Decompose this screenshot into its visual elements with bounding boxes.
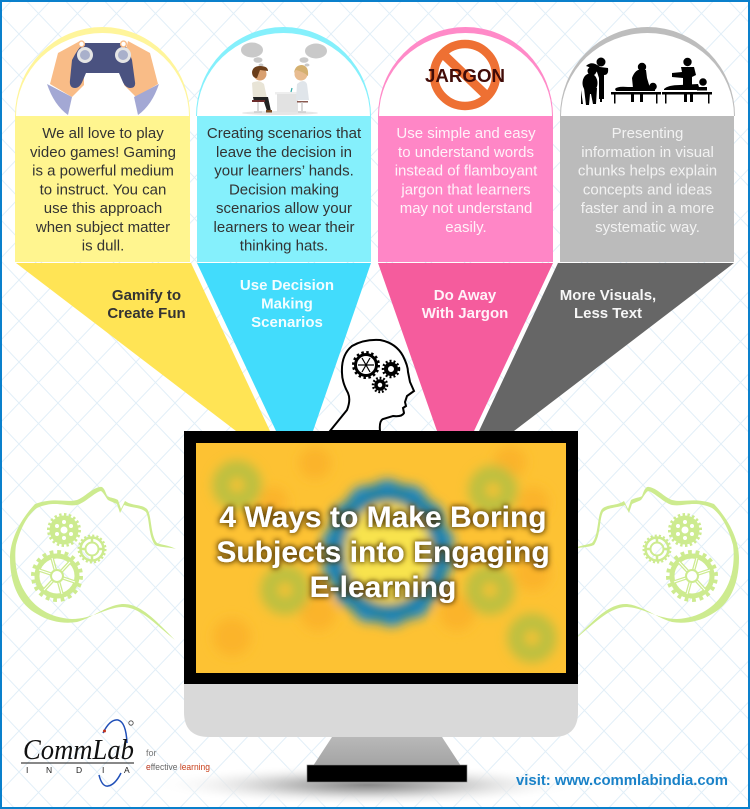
logo: CommLab India: N bbox=[46, 765, 52, 775]
dome: gray bbox=[560, 27, 735, 199]
panel: visuals bbox=[479, 27, 735, 431]
monitor chin bbox=[184, 684, 578, 737]
gear C bbox=[668, 552, 716, 600]
funnel: gamify heading: Gamify to bbox=[112, 287, 181, 304]
logo: CommLab India: D bbox=[76, 765, 82, 775]
description: decision scenarios: Decision making bbox=[229, 181, 339, 198]
description: gamify: We all love to play bbox=[42, 125, 164, 142]
funnel: visuals heading: More Visuals, bbox=[560, 287, 656, 304]
panel: jargon bbox=[378, 27, 553, 431]
description: gamify bbox=[15, 116, 190, 262]
gear B bbox=[78, 536, 106, 562]
funnel: visuals heading bbox=[479, 263, 734, 431]
dome: cyan bbox=[196, 27, 371, 199]
gear C bbox=[33, 552, 81, 600]
description: gamify: is dull. bbox=[82, 238, 124, 254]
icon: no jargon sign: JARGON bbox=[425, 65, 505, 86]
gear: small bbox=[373, 378, 387, 392]
funnel: jargon heading: Do Away bbox=[434, 287, 497, 304]
dome: yellow bbox=[15, 27, 190, 199]
funnel: jargon heading: With Jargon bbox=[422, 305, 508, 322]
description: jargon bbox=[378, 116, 553, 262]
monitor stand bbox=[313, 737, 461, 766]
title: Subjects into Engaging bbox=[216, 536, 550, 569]
description: jargon: may not understand bbox=[400, 200, 532, 217]
funnel: visuals heading: Less Text bbox=[574, 305, 642, 322]
funnel: gamify heading bbox=[16, 263, 270, 431]
funnel: decision heading: Use Decision bbox=[240, 277, 334, 294]
description: visuals: faster and in a more bbox=[581, 200, 714, 217]
description: jargon: easily. bbox=[445, 219, 487, 236]
panel: gamify bbox=[15, 27, 270, 431]
funnel: decision heading: Scenarios bbox=[251, 314, 323, 331]
funnel: decision heading bbox=[197, 263, 371, 431]
gear: medium bbox=[383, 361, 399, 377]
description: decision scenarios: Creating scenarios that bbox=[207, 125, 362, 142]
gear B bbox=[644, 536, 670, 562]
description: decision scenarios: scenarios allow your bbox=[216, 200, 352, 217]
website link: visit: www.commlabindia.com bbox=[516, 772, 728, 789]
icon: head silhouette with gears bbox=[330, 340, 414, 431]
logo: CommLab India: effective learning bbox=[146, 762, 210, 773]
description: visuals: information in visual bbox=[581, 144, 714, 161]
logo: CommLab India: I bbox=[102, 765, 104, 775]
description: jargon: to understand words bbox=[398, 144, 534, 161]
description: gamify: video games! Gaming bbox=[30, 144, 176, 161]
funnel: jargon heading bbox=[378, 263, 553, 431]
description: gamify: is a powerful medium bbox=[32, 163, 174, 180]
logo: CommLab India: for bbox=[146, 748, 157, 758]
description: decision scenarios: your learners’ hands. bbox=[214, 163, 354, 180]
logo: CommLab India: CommLab bbox=[23, 735, 134, 766]
description: decision scenarios: leave the decision in bbox=[216, 144, 352, 161]
icon: two people at a desk with thought clouds bbox=[241, 42, 327, 115]
icon: no jargon sign bbox=[425, 44, 505, 106]
panel: decision scenarios bbox=[196, 27, 371, 431]
description: jargon: jargon that learners bbox=[400, 181, 531, 198]
description: jargon: Use simple and easy bbox=[396, 125, 536, 142]
gear: large bbox=[354, 352, 378, 378]
monitor base bbox=[307, 765, 467, 782]
right head with gears bbox=[573, 487, 739, 640]
title bbox=[216, 501, 550, 604]
description: visuals bbox=[560, 116, 734, 262]
description: jargon: instead of flamboyant bbox=[395, 163, 538, 180]
gear A bbox=[48, 514, 80, 546]
screen with blurred gears bbox=[196, 443, 566, 673]
description: decision scenarios: learners to wear their bbox=[214, 219, 354, 236]
description: decision scenarios: thinking hats. bbox=[240, 238, 328, 254]
funnel: gamify heading: Create Fun bbox=[107, 305, 186, 322]
funnel: decision heading: Making bbox=[261, 296, 313, 312]
title: 4 Ways to Make Boring bbox=[219, 501, 547, 534]
description: gamify: when subject matter bbox=[35, 219, 170, 236]
dome: pink bbox=[378, 27, 553, 199]
description: gamify: use this approach bbox=[44, 200, 162, 217]
desk shadow bbox=[153, 764, 583, 806]
logo: CommLab India bbox=[21, 720, 210, 786]
left head with gears bbox=[10, 487, 176, 640]
icon: hands holding game controller bbox=[47, 40, 159, 115]
description: visuals: concepts and ideas bbox=[583, 181, 712, 198]
monitor frame bbox=[184, 431, 578, 684]
monitor bbox=[184, 431, 578, 782]
icon: black therapy silhouettes bbox=[581, 58, 712, 105]
description: visuals: chunks helps explain bbox=[578, 163, 717, 180]
description: gamify: to instruct. You can bbox=[40, 181, 166, 198]
logo: CommLab India: I bbox=[26, 765, 28, 775]
title: E-learning bbox=[310, 571, 456, 604]
description: visuals: systematic way. bbox=[595, 219, 700, 236]
description: decision scenarios bbox=[197, 116, 371, 262]
gear A bbox=[670, 514, 700, 546]
logo: CommLab India: A bbox=[124, 765, 130, 775]
description: visuals: Presenting bbox=[612, 125, 683, 142]
